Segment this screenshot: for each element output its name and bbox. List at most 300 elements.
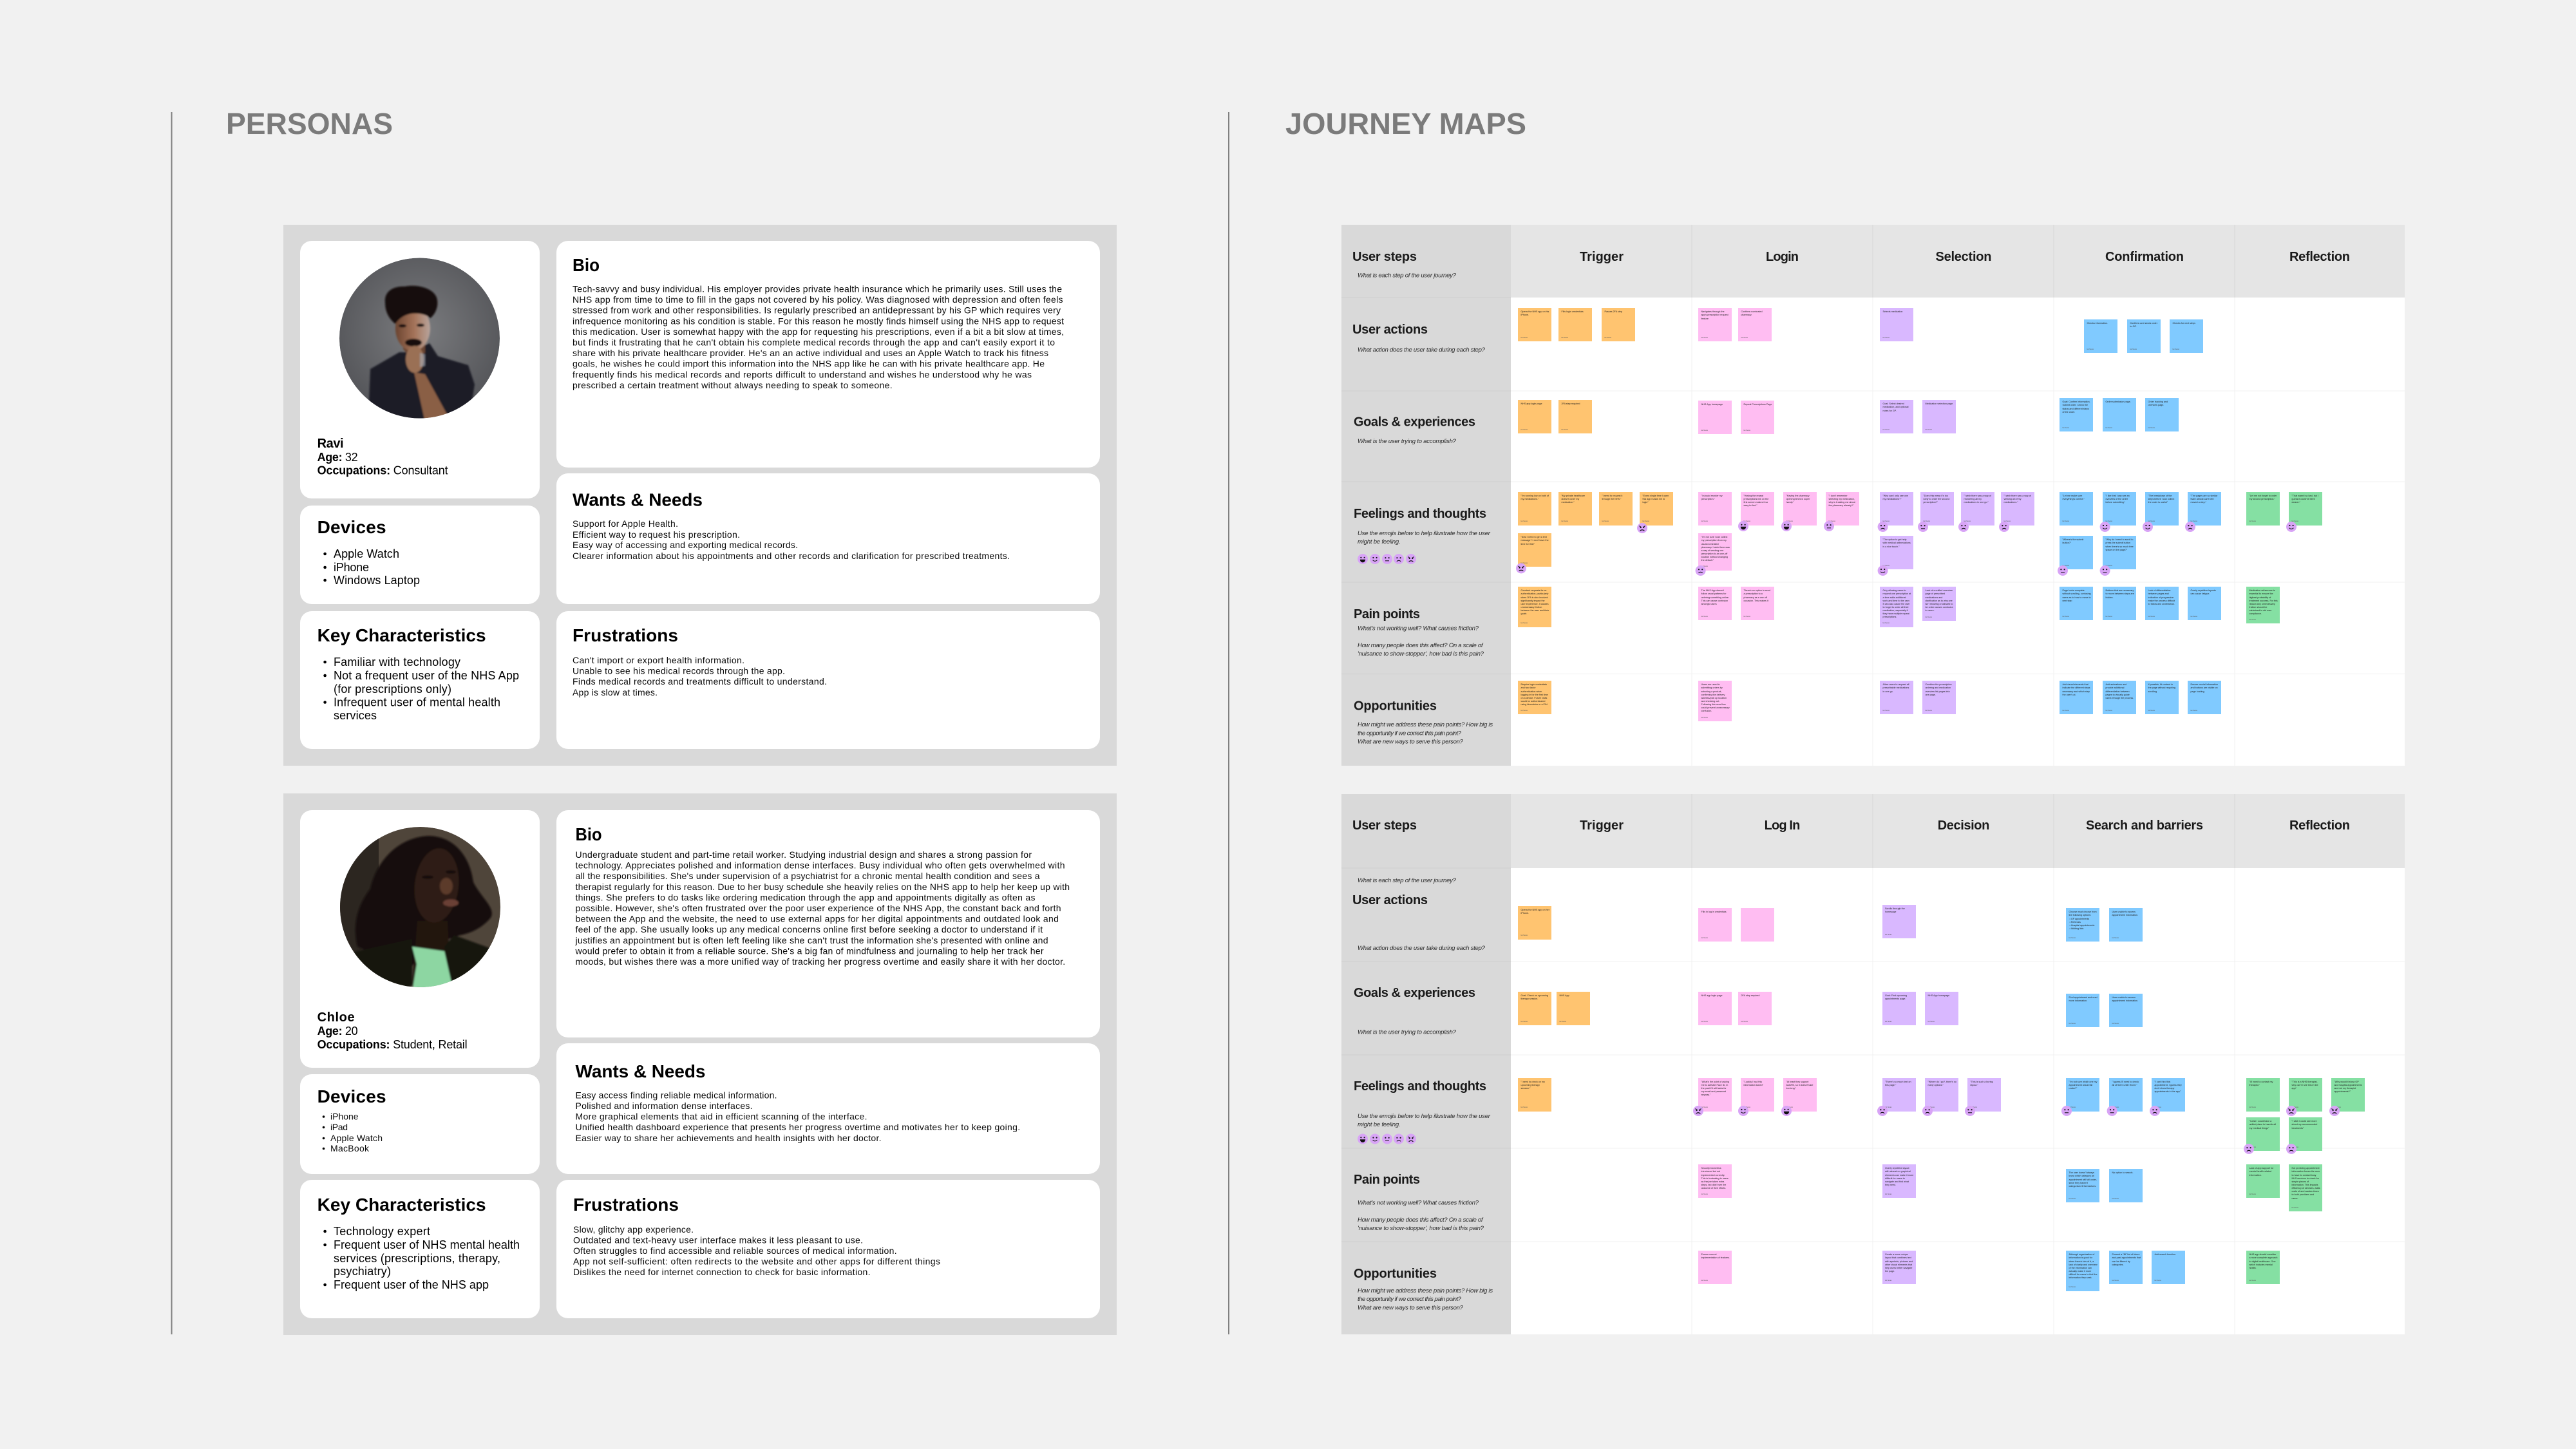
sticky notes: journey map 1 goals and experiences: Ian Nevas [2062,428,2069,429]
sticky notes: journey map 1 pain points: Page looks complete without scrolling, confusing users as to how to move to next step [2062,589,2091,602]
sticky notes: journey map 1 feelings and thoughts: "I wish there was a way of viewing all of my medications." [2004,495,2031,504]
sticky notes: journey map 2 feelings and thoughts: "I'll need to contact my therapist." [2249,1081,2273,1086]
sticky notes: journey map 2 user actions: Ian Nevas [1521,935,1528,936]
sticky notes: journey map 2 feelings and thoughts: "At least they support AutoFill, so it doesn't take too long." [1786,1081,1813,1090]
text: wants and needs body: Support for Apple Health. [573,518,678,529]
section divider: personas [171,112,173,1334]
text: frustrations body [573,1224,940,1277]
sticky notes: journey map 2 goals and experiences: Ian Nevas [1741,1021,1748,1023]
sticky notes: journey map 1 pain points: Ian Nevas [2148,616,2155,618]
sticky notes: journey map 1 feelings and thoughts: Ian Nevas [2106,521,2112,522]
row header: pain points: 'nuisance to show-stopper', how bad is this pain? [1358,650,1484,658]
list: devices: Apple Watch [334,547,399,560]
sticky notes: journey map 1 user actions: Ian Nevas [2087,349,2094,350]
sticky notes: journey map 1 feelings and thoughts: Ian Nevas [1923,521,1930,522]
sticky notes: journey map 2 user actions: Scrolls through the homepage [1885,907,1905,913]
sticky notes: journey map 2 opportunities: Ensure correct implementation of features. [1701,1253,1730,1259]
sticky notes: journey map 1 feelings and thoughts: Ian Nevas [1701,521,1708,522]
sticky notes: journey map 1 pain points: Ian Nevas [1883,623,1889,624]
sticky notes: journey map 1 opportunities: Ian Nevas [1521,710,1528,712]
sticky notes: journey map 1 goals and experiences: Ian Nevas [1926,430,1932,431]
list: key characteristics: services [334,709,377,722]
sticky notes: journey map 2 user actions: Opens the NHS app on her iPhone. [1521,909,1549,914]
row header: opportunities [1354,1267,1493,1311]
sticky notes: journey map 1 user actions: Ian Nevas [1605,337,1611,339]
card: Ravi frustrations [556,611,1100,749]
row header: opportunities: What are new ways to serve this person? [1358,1305,1464,1311]
text: Chloe occupation: Occupations: Student, Retail [317,1038,468,1051]
sticky notes: journey map 2 feelings and thoughts: Ian Nevas [1786,1107,1793,1108]
row header: user steps: What is each step of the user journey? [1358,272,1457,279]
sticky notes: journey map 1 pain points: Buttons that are necessary to move between steps are hidden. [2106,589,2134,599]
panel: journey map Ravi [1341,225,2405,766]
list: key characteristics: Familiar with technology [334,656,460,668]
sticky notes: journey map 1 opportunities: Users are used to submitting orders by selecting a product, confirming the delivery address/pick up location and checking out. Following this user flow could prevent unnecessary confusion. [1701,683,1730,712]
grid: journey map 2 background [1341,794,2405,1334]
sticky notes: journey map 1 pain points: Ian Nevas [2249,620,2256,621]
text: wants and needs body: Easy access finding reliable medical information. [576,1090,777,1100]
sticky notes: journey map 2 pain points: No option to search. [2112,1171,2134,1174]
text: wants and needs body: Efficient way to request his prescription. [573,529,740,540]
text: Chloe age: Age: 20 [317,1025,358,1037]
sticky notes: journey map 2 feelings and thoughts: Ian Nevas [2334,1107,2341,1108]
sticky notes: journey map 2 opportunities: Ian Nevas [2069,1287,2076,1288]
sticky notes: journey map 2 goals and experiences [1518,992,2143,1027]
icons: journey map 1 emoji reactions [1516,521,2297,576]
sticky notes: journey map 2 feelings and thoughts: "I wish I could see more about my recommended treatments" [2291,1120,2317,1130]
sticky notes: journey map 1 feelings and thoughts: Ian Nevas [2062,565,2069,567]
sticky notes: journey map 2 pain points: Lack of app support for mental health related information. [2249,1167,2273,1176]
row header: user steps: What is each step of the user journey? [1358,877,1457,884]
heading: bio: Bio [576,824,601,844]
list: devices: iPhone [334,561,369,574]
card: Ravi bio [556,241,1100,468]
list: key characteristics: Infrequent user of mental health [334,696,500,708]
row header: opportunities: What are new ways to serve this person? [1358,739,1464,746]
sticky notes: journey map 1 goals and experiences [1518,398,2179,434]
sticky notes: journey map 1 goals and experiences: Goal: Confirm information. Submit order. Check the status and different steps of the order. [2062,401,2090,413]
sticky notes: journey map 1 goals and experiences: Ian Nevas [1744,430,1750,431]
column headers: Decision [1938,819,1989,833]
sticky notes: journey map 1 feelings and thoughts: Ian Nevas [1701,566,1708,567]
sticky notes: journey map 2 opportunities: Ian Nevas [1885,1280,1891,1282]
text: wants and needs body: Unified health dashboard experience that presents her progress overtime and motivates her to keep going. [576,1122,1020,1132]
text: wants and needs body: Polished and information dense interfaces. [576,1101,752,1111]
row header: user steps [1352,819,1457,884]
sticky notes: journey map 1 feelings and thoughts: "Why do I need to scroll to press the submit button when there's so much free space on the page?" [2106,538,2134,551]
sticky notes: journey map 2 feelings and thoughts: Ian Nevas [2069,1107,2076,1108]
row header: pain points: What's not working well? What causes friction? [1358,1200,1479,1207]
column headers [1580,250,2350,264]
sticky notes: journey map 2 feelings and thoughts: Ian Nevas [1971,1107,1977,1108]
row header: pain points: How many people does this affect? On a scale of [1358,642,1484,649]
text: frustrations body: Unable to see his medical records through the app. [573,666,785,676]
column headers: Log In [1765,819,1800,833]
row header: pain points [1354,1173,1484,1232]
text: frustrations body [573,655,827,697]
text: bio body: feel of the app. She usually looks up any medical concerns online first before seeking a doctor to understand if it [576,924,1043,934]
sticky notes: journey map 2 goals and experiences: Ian Nevas [1885,1021,1891,1023]
sticky notes: journey map 2 opportunities: Ian Nevas [1701,1280,1708,1282]
sticky notes: journey map 2 feelings and thoughts: Ian Nevas [1885,1107,1891,1108]
row header: user actions: User actions [1352,323,1428,337]
sticky notes: journey map 1 feelings and thoughts: "I'm not sure I can collect my prescription from my usual nominated pharmacy. I wish there was a way of sending one prescription to an one-off location without changing the default." [1701,536,1730,562]
column headers: Login [1766,250,1799,264]
sticky notes: journey map 1 goals and experiences: Ian Nevas [1561,430,1568,431]
text: wants and needs body: More graphical elements that aid in efficient scanning of the interface. [576,1112,867,1122]
sticky notes: journey map 2 feelings and thoughts: "I'm not sure which one my appointment would fall under?" [2069,1081,2098,1090]
heading: wants and needs: Wants & Needs [573,490,703,510]
text: bio body: moods, but wishes there was a more unified way of tracking her progress overtime and easily share it with her doctor. [576,956,1065,967]
text: bio body: infrequence monitoring as his condition is stable. For this reason he mostly finds himself using the NHS app to request [573,316,1064,326]
text: bio body: between the App and the website, the need to use external apps for her digital appointments and outdated look and [576,914,1059,924]
row header: opportunities: the opportunity if we correct this pain point? [1358,730,1462,737]
sticky notes: journey map 2 pain points: Not providing appointment information forces the user to have to contact busy NHS services to check for simple pieces of information. This impacts efficiency of services, adds costs of and wastes times to both providers and users. [2291,1167,2320,1200]
list: devices [323,1112,383,1153]
column headers: Selection [1936,250,1991,264]
card: Chloe profile [300,810,540,1068]
sticky notes: journey map 1 user actions: Ian Nevas [1741,337,1748,339]
text: bio body: would prefer to obtain it from a reliable source. She's a big fan of mindfulness and journaling to help her track her [574,945,1044,956]
sticky notes: journey map 1 feelings and thoughts: "The pages are so similar that I almost can't tell I moved a step." [2191,495,2217,504]
heading: frustrations: Frustrations [573,625,678,645]
sticky notes: journey map 1 goals and experiences: Medication selection page. [1926,402,1953,405]
sticky notes: journey map 1 feelings and thoughts: Ian Nevas [2148,521,2155,522]
sticky notes: journey map 2 feelings and thoughts: Ian Nevas [2155,1107,2161,1108]
text: bio body: all the responsibilities. She's under supervision of a psychiatrist for a chronic mental health condition and sees a [576,871,1040,881]
sticky notes: journey map 1 feelings and thoughts: Ian Nevas [2291,521,2298,522]
sticky notes: journey map 1 user actions: Confirms and sends order to GP. [2130,322,2157,328]
row header: feelings and thoughts: Feelings and thoughts [1354,1079,1486,1094]
sticky notes: journey map 2 goals and experiences: Find appointment and read more information. [2069,996,2098,1002]
sticky notes: journey map 1 pain points: Lack of a unified overview page of prescribed medications and clarification as to why one isn't showing or allowed to be order causes confusion to users. [1926,589,1953,612]
sticky notes: journey map 1 pain points: Medication adherence is essential to ensure the highest probability of treatment success. For this reason any unnecessary friction should be minimised to aid user compliance. [2249,589,2278,615]
sticky notes: journey map 1 feelings and thoughts: "I'm running low on both of my medications." [1521,495,1549,500]
row header: goals and experiences: Goals & experiences [1354,415,1475,429]
sticky notes: journey map 1 feelings and thoughts: "Having the pharmacy opening times is super handy." [1786,495,1810,504]
text: Chloe name: Chloe [317,1010,355,1025]
heading: bio: Bio [573,255,600,275]
sticky notes: journey map 1 goals and experiences: Repeat Prescriptions Page [1744,403,1772,406]
sticky notes: journey map 2 user actions: • Waiting lists [2070,927,2083,930]
sticky notes: journey map 1 feelings and thoughts: "Now I need to get a text message? I don't have the time for this!" [1521,536,1549,545]
sticky notes: journey map 1 feelings and thoughts: "I should reorder my prescription." [1701,495,1723,500]
sticky notes: journey map 2 opportunities: Ian Nevas [2112,1280,2119,1282]
row header: opportunities: Opportunities [1354,699,1437,714]
row header: user steps: User steps [1352,250,1417,264]
text: bio body: therapist regularly for this reason. Due to her busy schedule she heavily relies on the NHS app to help her keep up with [576,882,1070,892]
column headers: Confirmation [2105,250,2184,264]
sticky notes: journey map 1 user actions [1518,308,2203,353]
sticky notes: journey map 1 goals and experiences: Goal: Select desired medication, add optional notes for GP. [1883,402,1908,412]
text: bio body: justifies an appointment but is often left feeling like she can't trust the information she's presented with online and [574,935,1048,945]
sticky notes: journey map 1 pain points: Lack of differentiation between pages and indication of progression make the process difficult to follow and understand. [2148,589,2175,605]
list: key characteristics: Technology expert [334,1225,430,1238]
row header: goals and experiences: What is the user trying to accomplish? [1358,1029,1457,1036]
list: devices: Apple Watch [330,1133,383,1143]
sticky notes: journey map 1 opportunities: Ian Nevas [1701,717,1708,719]
sticky notes: journey map 2 goals and experiences: Ian Nevas [1928,1021,1935,1023]
list: key characteristics: Frequent user of NHS mental health [334,1238,520,1251]
column headers [1580,819,2350,833]
text: wants and needs body [573,518,1010,561]
sticky notes: journey map 1 opportunities: Ian Nevas [2191,710,2197,712]
sticky notes: journey map 2 opportunities: Ian Nevas [2155,1280,2161,1282]
sticky notes: journey map 1 user actions: Ian Nevas [2130,349,2137,350]
sticky notes: journey map 1 feelings and thoughts: "That wasn't so bad, but I guess it could've been clearer." [2291,495,2318,504]
text: frustrations body: Finds medical records and treatments difficult to understand. [573,676,827,687]
sticky notes: journey map 1 pain points: The NHS App doesn't follow usual patterns for ordering something online. This can cause confusion amongst users [1701,589,1729,605]
list: key characteristics: Not a frequent user of the NHS App [334,669,519,682]
row header: pain points: 'nuisance to show-stopper', how bad is this pain? [1358,1225,1484,1232]
sticky notes: journey map 2 goals and experiences: NHS app login page [1701,994,1723,997]
row header: feelings and thoughts: might be feeling. [1358,538,1401,545]
text: frustrations body: App not self-sufficient: often redirects to the website and other apps for different things [573,1256,940,1267]
sticky notes: journey map 2 feelings and thoughts: Ian Nevas [1744,1107,1750,1108]
text: bio body: Tech-savvy and busy individual. His employer provides private health insurance which he primarily uses. Still uses the [573,283,1062,294]
sticky notes: journey map 1 user actions: Ian Nevas [1883,337,1889,339]
sticky notes: journey map 2 feelings and thoughts: Ian Nevas [2112,1107,2119,1108]
sticky notes: journey map 2 user actions: Ian Nevas [2069,938,2076,939]
sticky notes: journey map 1 user actions: Confirms nominated pharmacy [1741,310,1762,316]
sticky notes: journey map 2 pain points: Ian Nevas [2112,1198,2119,1200]
sticky notes: journey map 1 pain points: Only allowing users to request one prescription at a time adds additional work and time to the user. It can also cause the user to forget to order all their medication, especially if they have multiple repeat prescriptions. [1883,589,1911,618]
text: bio body: things. She prefers to do tasks like ordering medication through the app and appointments digitally as often as [576,892,1036,902]
sticky notes: journey map 1 user actions: Ian Nevas [2173,349,2179,350]
heading: devices: Devices [317,517,386,537]
sticky notes: journey map 2 goals and experiences: User unable to access appointment information. [2112,996,2138,1002]
sticky notes: journey map 1 feelings and thoughts: Ian Nevas [2062,521,2069,522]
sticky notes: journey map 1 feelings and thoughts: Ian Nevas [1561,521,1568,522]
panel: journey map Chloe [1341,794,2405,1334]
row header: goals and experiences: Goals & experiences [1354,986,1475,1000]
sticky notes: journey map 1 opportunities: Add animations and provide additional differentiation between pages to visually guide users through the process. [2106,683,2134,699]
sticky notes: journey map 1 feelings and thoughts: Ian Nevas [1744,521,1750,522]
sticky notes: journey map 1 feelings and thoughts: Ian Nevas [2004,521,2011,522]
row header: pain points: How many people does this affect? On a scale of [1358,1217,1484,1224]
text: frustrations body: Outdated and text-heavy user interface makes it less pleasant to use. [573,1235,863,1245]
sticky notes: journey map 2 pain points: Ian Nevas [2291,1208,2298,1209]
sticky notes: journey map 2 feelings and thoughts: "What's the point of asking me to activate Face ID, in the past if it still asks for my email and password anyway." [1701,1081,1729,1096]
sticky notes: journey map 1 user actions: Ian Nevas [1561,337,1568,339]
sticky notes: journey map 1 feelings and thoughts: Ian Nevas [1883,521,1889,522]
section divider: journey maps [1228,112,1229,1334]
sticky notes: journey map 2 pain points [1698,1164,2322,1211]
sticky notes: journey map 1 goals and experiences: Ian Nevas [2106,428,2112,429]
column headers: Reflection [2289,819,2350,833]
sticky notes: journey map 2 opportunities: Add search function. [2155,1253,2176,1256]
sticky notes: journey map 2 user actions: User unable to access appointment information. [2112,911,2138,916]
sticky notes: journey map 1 pain points: There's no option to send a prescription to a pharmacy as a one off occasion. This makes it [1744,589,1770,602]
row header: pain points: Pain points [1354,607,1420,621]
row header: goals and experiences [1354,986,1475,1036]
text: Ravi age: Age: 32 [317,451,358,464]
title: journey maps: JOURNEY MAPS [1285,107,1526,140]
sticky notes: journey map 1 opportunities: Add visual elements that indicate the different steps necessary and which step the user's at. [2062,683,2090,696]
sticky notes: journey map 1 opportunities: Ian Nevas [2106,710,2112,712]
row header: pain points: What's not working well? What causes friction? [1358,625,1479,632]
list: key characteristics [323,656,519,722]
card: Chloe key characteristics [300,1180,540,1318]
sticky notes: journey map 1 feelings and thoughts: "Every single time I open this app it asks me to login" [1642,495,1669,504]
sticky notes: journey map 2 feelings and thoughts: "This is a NHS therapist, why can't I see this in the app" [2291,1081,2318,1090]
sticky notes: journey map 1 feelings and thoughts: "Why can I only see one my medications?" [1883,495,1908,500]
sticky notes: journey map 2 opportunities [1698,1251,2280,1291]
sticky notes: journey map 2 pain points: Ian Nevas [2069,1198,2076,1200]
sticky notes: journey map 2 pain points: Ian Nevas [2249,1194,2256,1195]
row header: goals and experiences [1354,415,1475,445]
sticky notes: journey map 1 feelings and thoughts: "Let me not forget to order my second prescription." [2249,495,2277,500]
sticky notes: journey map 2 goals and experiences: Ian Nevas [2069,1023,2076,1025]
sticky notes: journey map 1 pain points: Ian Nevas [1701,616,1708,618]
sticky notes: journey map 1 user actions: Passes 2FA step [1605,310,1622,313]
sticky notes: journey map 2 opportunities: Create a more unique layout that combines text with symbols, pictures and other visual elements that help users better navigate the page. [1885,1253,1913,1273]
sticky notes: journey map 1 feelings and thoughts: Ian Nevas [1521,521,1528,522]
sticky notes: journey map 1 pain points: Constant requests for re-authentication, particularly when 2FA is also involved significantly impact the user experience. It causes unnecessary friction between the user and their goals [1521,589,1549,615]
sticky notes: journey map 2 goals and experiences: Goal: Check on upcoming therapy session. [1521,994,1548,1000]
row header: user actions: What action does the user take during each step? [1358,945,1486,952]
sticky notes: journey map 1 feelings and thoughts: Ian Nevas [1521,563,1528,564]
text: wants and needs body: Easy way of accessing and exporting medical records. [573,540,798,550]
sticky notes: journey map 1 feelings and thoughts: Ian Nevas [2191,521,2197,522]
sticky notes: journey map 1 feelings and thoughts: "Does this mean it's too early to order the second prescription?" [1923,495,1949,504]
sticky notes: journey map 1 pain points [1518,587,2280,627]
column headers: Search and barriers [2086,819,2203,833]
sticky notes: journey map 1 feelings and thoughts: Ian Nevas [2249,521,2256,522]
heading: key characteristics: Key Characteristics [317,1195,486,1215]
sticky notes: journey map 2 goals and experiences: Goal: Find upcoming appointments page. [1885,994,1907,1000]
row header: user steps: User steps [1352,819,1417,833]
sticky notes: journey map 1 feelings and thoughts: Ian Nevas [2106,565,2112,567]
sticky notes: journey map 2 goals and experiences: Ian Nevas [1560,1021,1566,1023]
sticky notes: journey map 2 feelings and thoughts: "This is such a boring layout." [1971,1081,1993,1086]
sticky notes: journey map 1 feelings and thoughts: "I don't remember selecting my medication, why is it asking me about the pharmacy already?" [1829,495,1855,507]
heading: frustrations: Frustrations [573,1195,679,1215]
column headers: Reflection [2289,250,2350,264]
row header: opportunities [1354,699,1493,746]
row header: opportunities: Opportunities [1354,1267,1437,1281]
sticky notes: journey map 2 pain points: Security biometrics introduced but not implemented correctly. This is frustrating to users as they've taken extra steps, but didn't see the outcome of their efforts. [1701,1167,1728,1189]
sticky notes: journey map 2 pain points: Ian Nevas [1701,1194,1708,1195]
sticky notes: journey map 2 goals and experiences: Ian Nevas [1521,1021,1528,1023]
sticky notes: journey map 2 user actions: • Hospital appointments [2070,924,2094,927]
row header: goals and experiences: What is the user trying to accomplish? [1358,438,1457,445]
card: Chloe frustrations [556,1180,1100,1318]
row header: pain points [1354,607,1484,658]
sticky notes: journey map 1 pain points: Ian Nevas [2106,616,2112,618]
list: devices: Windows Laptop [334,574,420,587]
list: devices: iPad [330,1122,348,1132]
text: bio body [573,283,1064,390]
list: devices [323,547,420,587]
card: Ravi wants and needs [556,473,1100,604]
sticky notes: journey map 2 goals and experiences: 2FA step required [1741,994,1759,997]
card: Ravi devices [300,506,540,604]
sticky notes: journey map 1 opportunities: If possible, fit content in the page without requiring scrolling [2148,683,2175,693]
row header: pain points: Pain points [1354,1173,1420,1187]
text: wants and needs body: Easier way to share her achievements and health insights with her doctor. [576,1133,881,1143]
heading: wants and needs: Wants & Needs [576,1061,706,1081]
sticky notes: journey map 1 feelings and thoughts: Ian Nevas [1642,521,1649,522]
sticky notes: journey map 2 feelings and thoughts: "There's so much text on this page." [1885,1081,1911,1086]
sticky notes: journey map 1 feelings and thoughts: "My private healthcare doesn't cover my medication." [1561,495,1585,504]
sticky notes: journey map 2 user actions: Fills in log in credentials [1701,911,1727,913]
card: Chloe wants and needs [556,1043,1100,1174]
sticky notes: journey map 1 user actions: Selects medication [1883,310,1902,313]
sticky notes: journey map 1 user actions: Ian Nevas [1521,337,1528,339]
sticky notes: journey map 1 pain points: Ian Nevas [2062,616,2069,618]
text: frustrations body: App is slow at times. [573,687,658,697]
sticky notes: journey map 2 user actions: Ian Nevas [1701,938,1708,939]
sticky notes: journey map 1 goals and experiences: Order tracking and overview page. [2148,401,2168,406]
panel: persona Ravi [283,225,1117,766]
sticky notes: journey map 2 feelings and thoughts: "I need to check on my upcoming therapy session." [1521,1081,1545,1090]
row header: feelings and thoughts: Feelings and thoughts [1354,507,1486,521]
sticky notes: journey map 2 feelings and thoughts: Ian Nevas [2291,1147,2298,1148]
row header: user actions: What action does the user take during each step? [1358,346,1486,354]
sticky notes: journey map 1 feelings and thoughts: "I need to request it through the NHS." [1602,495,1622,500]
sticky notes: journey map 1 opportunities: Ensure crucial information and buttons are visible on page loading. [2191,683,2218,693]
panel: persona Chloe [283,793,1117,1335]
row header: user steps [1352,250,1457,279]
row header: user actions [1352,323,1486,354]
sticky notes: journey map 2 feelings and thoughts: Ian Nevas [1521,1107,1528,1108]
sticky notes: journey map 1 feelings and thoughts: Ian Nevas [1883,565,1889,567]
sticky notes: journey map 1 pain points: Ian Nevas [1926,617,1932,618]
sticky notes: journey map 1 opportunities: Allow users to request all prescribable medications in one go. [1883,683,1909,693]
text: bio body: Undergraduate student and part-time retail worker. Studying industrial design and shares a strong passion for [576,849,1032,860]
sticky notes: journey map 1 opportunities [1518,681,2221,721]
sticky notes: journey map 1 goals and experiences: 2FA step required [1561,402,1580,405]
sticky notes: journey map 1 user actions: Ian Nevas [1701,337,1708,339]
sticky notes: journey map 1 user actions: Checks information. [2087,322,2108,325]
list: devices: MacBook [330,1143,370,1153]
row header: feelings and thoughts [1354,507,1491,564]
list: key characteristics: (for prescriptions only) [334,683,451,696]
sticky notes: journey map 2 goals and experiences: Ian Nevas [1701,1021,1708,1023]
row header: user actions: User actions [1352,893,1428,907]
list: key characteristics [323,1225,520,1291]
sticky notes: journey map 2 opportunities: Present a "fill" list of future and past appointments that can be filtered by categories. [2112,1253,2141,1266]
sticky notes: journey map 2 pain points: The user doesn't always know which category an appointment will fall under, since they haven't categorised it themselves. [2069,1171,2097,1188]
list: devices: iPhone [330,1112,359,1122]
row header: opportunities: the opportunity if we correct this pain point? [1358,1296,1462,1303]
text: bio body [574,849,1070,967]
sticky notes: journey map 2 goals and experiences: NHS App [1560,994,1569,997]
column headers: Trigger [1580,819,1624,833]
sticky notes: journey map 1 opportunities: Ian Nevas [1926,710,1932,712]
sticky notes: journey map 1 feelings and thoughts: "I like that I can see an overview of the order before submitting." [2106,495,2130,504]
heading: key characteristics: Key Characteristics [317,625,486,645]
text: frustrations body: Can't import or export health information. [573,655,744,665]
text: bio body: technology. Appreciates polished and information dense interfaces. Busy individual who often gets overwhelmed with [576,860,1065,871]
sticky notes: journey map 1 feelings and thoughts: "The breakdown of the steps before I can collect the order is useful" [2148,495,2174,504]
row header: feelings and thoughts [1354,1079,1491,1144]
sticky notes: journey map 1 goals and experiences: Ian Nevas [1883,430,1889,431]
text: wants and needs body: Clearer information about his appointments and other records and clarification for prescribed treatments. [573,551,1010,561]
row header: feelings and thoughts: Use the emojis below to help illustrate how the user [1358,530,1491,537]
sticky notes: journey map 2 feelings and thoughts: Ian Nevas [2291,1107,2298,1108]
card: Ravi key characteristics [300,611,540,749]
text: bio body: stressed from work and other responsibilities. Is regularly prescribed an antidepressant by his GP which requires very [573,305,1061,316]
sticky notes: journey map 2 feelings and thoughts: "Why would it show GP and hospital appointments and not my therapist appointments?" [2334,1081,2362,1093]
sticky notes: journey map 1 feelings and thoughts: "The option to get help with medical abbreviations is a nice touch." [1883,538,1911,547]
sticky notes: journey map 1 opportunities: Ian Nevas [1883,710,1889,712]
sticky notes: journey map 2 feelings and thoughts: Ian Nevas [2249,1147,2256,1148]
sticky notes: journey map 2 feelings and thoughts: "I wish I could have a unified place to handle all my medical things" [2249,1120,2276,1130]
sticky notes: journey map 1 user actions: Opens the NHS app on his iPhone. [1521,310,1549,316]
sticky notes: journey map 2 pain points: Overly repetitive layout with almost no graphical elements can make it more difficult for users to navigate and find what they need. [1885,1167,1913,1186]
